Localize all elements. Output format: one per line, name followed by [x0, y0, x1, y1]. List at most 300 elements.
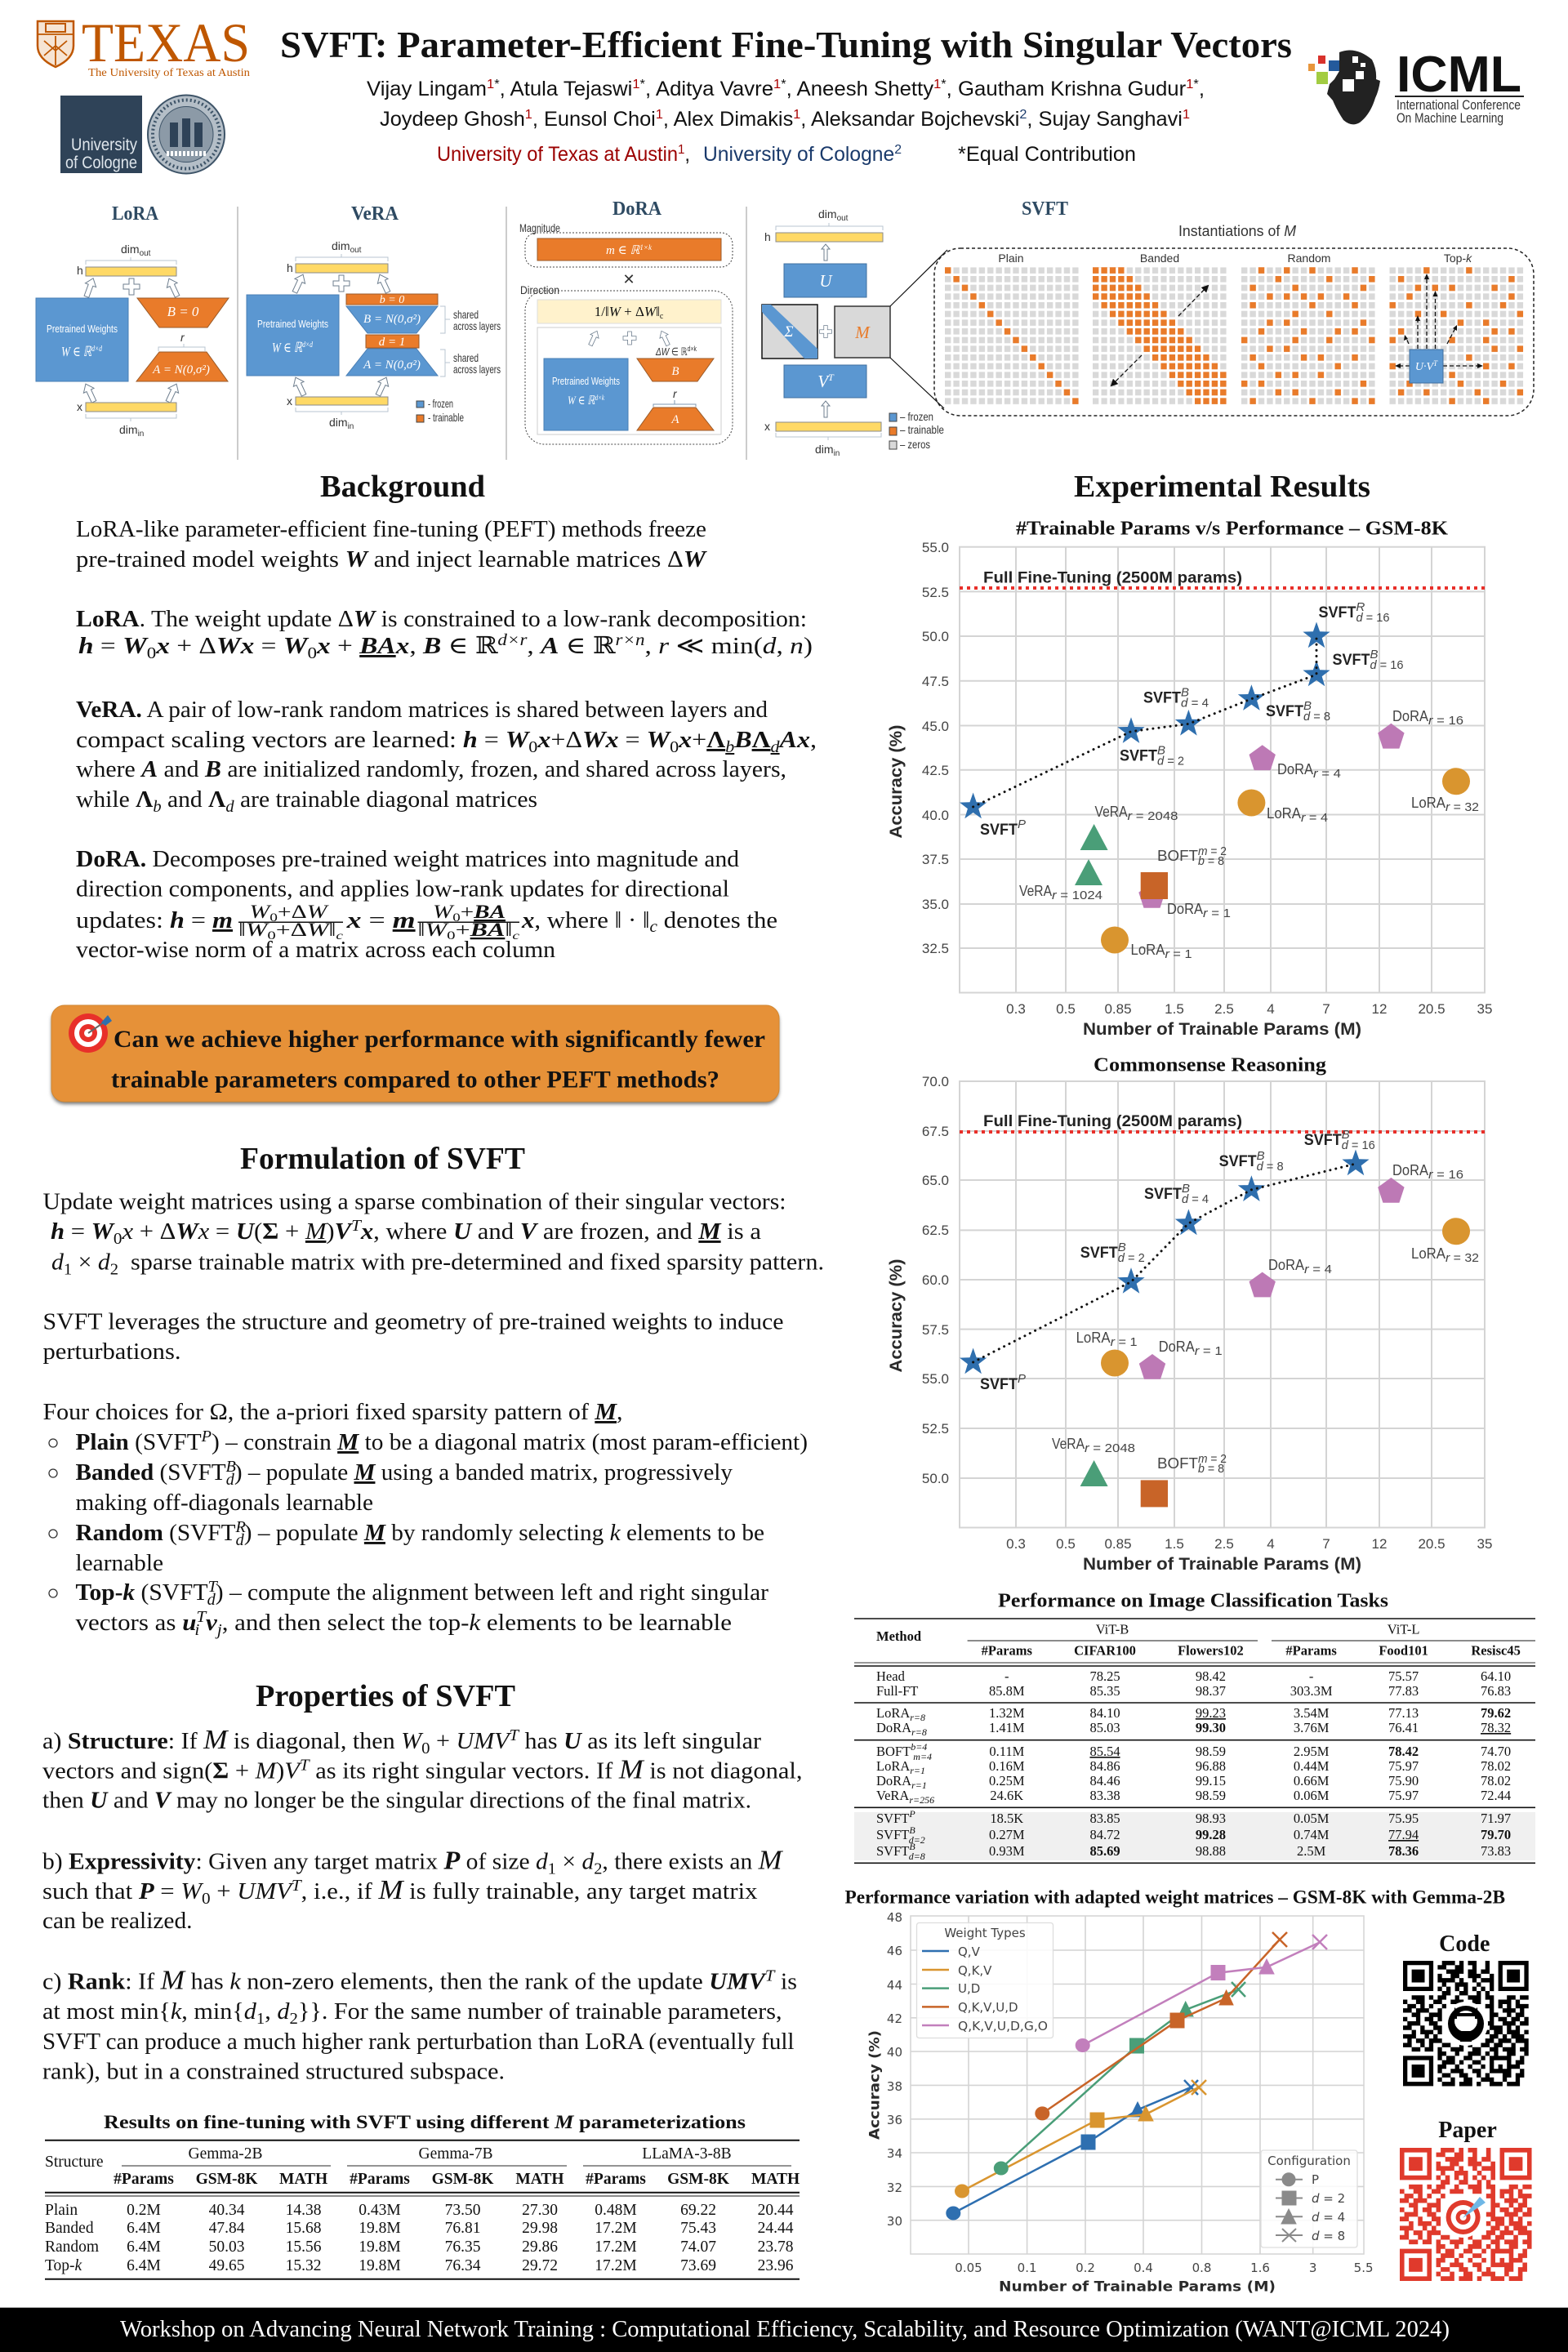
list: sparsity patterns: k elements to be learnable [469, 1610, 715, 1636]
point labels: BOFT [1157, 847, 1198, 864]
diagram: DoRA: W ∈ ℝ [568, 394, 603, 408]
point labels: r = 16 [1428, 714, 1463, 728]
diagram: SVFT: in [834, 449, 840, 458]
panel: background: A ∈ ℝ [541, 633, 608, 659]
point labels: d = 2 [1157, 755, 1184, 768]
panel: properties of SVFT: 0 [421, 1740, 430, 1757]
table: results on fine-tuning with M parameterizations: Banded [45, 2220, 94, 2237]
table: performance on image classification tasks: LoRA [876, 1758, 910, 1774]
table: results on fine-tuning with M parameterizations: 49.65 [209, 2257, 244, 2274]
table: performance on image classification tasks: 71.97 [1481, 1811, 1511, 1826]
panel: properties of SVFT: , [265, 1998, 277, 2025]
table: performance on image classification tasks: 74.70 [1481, 1744, 1511, 1759]
table: performance on image classification tasks: 75.97 [1388, 1788, 1419, 1803]
point labels: DoRA [1392, 707, 1429, 724]
icon: target with dart [69, 1013, 112, 1053]
panel: properties of SVFT: as its right singular vectors. If [310, 1757, 619, 1784]
list: sparsity patterns: Plain (SVFT [75, 1429, 201, 1455]
chart: trainable params vs performance on GSM-8K: 4 [1267, 1001, 1275, 1017]
table: performance on image classification tasks: 1.41M [989, 1720, 1025, 1735]
authors: Joydeep Ghosh [380, 108, 523, 131]
table: results on fine-tuning with M parameterizations: 29.86 [522, 2238, 558, 2256]
logo: University of Texas: TEXAS [82, 11, 250, 74]
diagram: SVFT: Instantiations of M [1178, 223, 1296, 239]
table: results on fine-tuning with M parameterizations: 76.34 [445, 2257, 481, 2274]
chart: commonsense reasoning: 55.0 [922, 1371, 949, 1387]
point labels: B [1181, 686, 1189, 699]
table: performance on image classification tasks: 78.42 [1388, 1744, 1419, 1759]
list: sparsity patterns: d [236, 1531, 245, 1549]
point labels: SVFT [1080, 1245, 1118, 1262]
panel: background: are trainable diagonal matrices [234, 786, 537, 813]
panel: background: LoRA. The weight update ΔW is constrained to a low-rank decomposition: [76, 606, 807, 632]
list: sparsity patterns: d [207, 1591, 216, 1609]
diagram: SVFT: dim [818, 207, 837, 220]
chart: performance variation with adapted weight matrices [844, 1886, 1505, 2295]
logo: ICML: International Conference [1396, 97, 1521, 113]
table: performance on image classification tasks: 2.95M [1294, 1744, 1330, 1759]
chart: commonsense reasoning: 57.5 [922, 1322, 949, 1338]
point labels: B [1182, 1182, 1190, 1196]
diagram: VeRA: b = 0 [380, 294, 404, 306]
panel: background: r ≪ min( d, n) [658, 633, 812, 659]
markers [960, 622, 1470, 954]
grid: top-k [1390, 267, 1526, 407]
table: results on fine-tuning with M parameterizations: #Params [586, 2171, 646, 2188]
table: performance on image classification tasks: 77.94 [1388, 1827, 1419, 1842]
table: results on fine-tuning with M parameterizations: #Params [350, 2171, 410, 2188]
chart: trainable params vs performance on GSM-8K: #Trainable Params v/s Performance – GSM-8K [1016, 518, 1448, 539]
table: performance on image classification tasks: ViT-B [1096, 1622, 1129, 1637]
panel: background: while Λ [76, 786, 153, 813]
panel: background: vector-wise norm of a matrix across each column [76, 937, 556, 963]
point labels [980, 1128, 1479, 1476]
panel: properties of SVFT: at most min{k, min{d [42, 1998, 256, 2025]
point labels: LoRA [1076, 1329, 1111, 1346]
panel: formulation of SVFT: Update weight matrices using a sparse combination of their singular vectors: [42, 1189, 786, 1215]
table: performance on image classification tasks: 3.76M [1294, 1720, 1330, 1735]
table: performance on image classification tasks: 0.11M [989, 1744, 1025, 1759]
table: results on fine-tuning with M parameterizations: 19.8M [359, 2220, 401, 2237]
chart: commonsense reasoning: 62.5 [922, 1223, 949, 1238]
list: sparsity patterns [49, 1428, 808, 1639]
table: performance on image classification tasks: 0.66M [1294, 1773, 1330, 1788]
diagram: DoRA: m ∈ ℝ [606, 244, 639, 257]
point labels: SVFT [1333, 652, 1370, 669]
list: sparsity patterns: ) – constrain [212, 1429, 337, 1455]
chart: trainable params vs performance on GSM-8K: 42.5 [922, 763, 949, 778]
chart: trainable params vs performance on GSM-8K: 37.5 [922, 852, 949, 867]
table: results on fine-tuning with M parameterizations: GSM-8K [196, 2171, 258, 2188]
table: performance on image classification tasks: 98.59 [1196, 1788, 1226, 1803]
authors: Vijay Lingam [367, 78, 483, 100]
formula: DoRA update: x = m [345, 907, 416, 933]
table: results on fine-tuning with M parameterizations: Random [45, 2238, 99, 2256]
panel: background: + BAx, B ∈ ℝ [336, 633, 490, 659]
affiliations: 1 [678, 143, 685, 157]
table: performance on image classification tasks: 73.83 [1481, 1843, 1511, 1859]
table: performance on image classification tasks: 78.32 [1481, 1720, 1511, 1735]
table: performance on image classification tasks: 98.88 [1196, 1843, 1226, 1859]
logo: University of Texas [38, 11, 250, 79]
formula: DoRA update: W [433, 902, 455, 922]
table: performance on image classification tasks: - [1309, 1668, 1313, 1684]
point labels: P [1018, 1372, 1026, 1386]
diagram: SVFT: U [819, 271, 833, 291]
table: results on fine-tuning with M parameterizations: 15.68 [286, 2220, 322, 2237]
table: performance on image classification tasks: m=4 [913, 1751, 932, 1762]
table: performance on image classification tasks: Head [876, 1668, 906, 1684]
diagram: SVFT: – frozen [900, 410, 933, 423]
diagram: DoRA: Direction [520, 283, 559, 296]
panel: properties of SVFT: 1 [548, 1860, 556, 1878]
authors: , Sujay Sanghavi [1027, 108, 1183, 131]
panel: properties of SVFT: M [758, 1846, 783, 1875]
panel: background: , [810, 727, 816, 753]
chart: performance variation with adapted weight matrices: 1.6 [1250, 2261, 1270, 2275]
table: results on fine-tuning with M parameterizations: 15.56 [286, 2238, 322, 2256]
table: performance on image classification tasks: d=8 [909, 1851, 925, 1862]
point labels: r = 2048 [1127, 809, 1178, 823]
panel: properties of SVFT: T [292, 1877, 303, 1895]
panel: formulation of SVFT: × [72, 1250, 98, 1276]
panel: properties of SVFT: 2 [594, 1860, 602, 1878]
table: performance on image classification tasks: r=8 [911, 1726, 927, 1738]
table: performance on image classification tasks: 99.28 [1196, 1827, 1226, 1842]
callout: research question: trainable parameters compared to other PEFT methods? [111, 1067, 719, 1093]
legend: configuration [1261, 2150, 1357, 2247]
panel: properties of SVFT: has [519, 1728, 564, 1754]
chart: performance variation with adapted weight matrices: Accuracy (%) [867, 2030, 884, 2140]
diagram: DoRA: 1×k [639, 243, 653, 252]
table: performance on image classification tasks: 72.44 [1481, 1788, 1511, 1803]
table: performance on image classification tasks: 0.06M [1294, 1788, 1330, 1803]
panel: properties of SVFT: such that P = W [42, 1878, 201, 1904]
table: performance on image classification tasks: d=2 [909, 1834, 925, 1846]
top-k alignment box and arrows: T [1433, 359, 1438, 368]
panel: formulation of SVFT: + ΔWx = U(Σ + M)V [139, 1218, 350, 1245]
panel: properties of SVFT: can be realized. [42, 1908, 193, 1934]
chart: performance variation with adapted weight matrices: 0.1 [1018, 2261, 1037, 2275]
formula: DoRA update: 0 [452, 911, 461, 924]
chart: trainable params vs performance on GSM-8K: 47.5 [922, 674, 949, 689]
diagram: SVFT: – trainable [900, 423, 944, 436]
point labels: r = 32 [1446, 800, 1479, 814]
chart: performance variation with adapted weight matrices: 48 [887, 1910, 902, 1925]
point labels: d = 16 [1342, 1138, 1375, 1152]
diagram: VeRA: W ∈ ℝ [272, 340, 312, 355]
table: performance on image classification tasks: Full-FT [876, 1683, 918, 1699]
formula: DoRA update: W ‖ [307, 920, 334, 940]
table: results on fine-tuning with M parameterizations: 24.44 [758, 2220, 794, 2237]
point labels: P [1018, 817, 1026, 831]
table: performance on image classification tasks: P [908, 1808, 915, 1820]
logo: University of Cologne: of Cologne [65, 154, 137, 172]
table: performance on image classification tasks: 85.03 [1089, 1720, 1120, 1735]
diagram: VeRA: across layers [453, 319, 501, 332]
point labels: SVFT [1143, 689, 1181, 707]
panel: background: 0 [147, 644, 156, 662]
list: sparsity patterns: T [196, 1608, 207, 1626]
table: performance on image classification tasks: DoRA [876, 1720, 911, 1735]
authors: 1 [632, 78, 640, 91]
point labels: d = 8 [1303, 710, 1330, 724]
point labels: R [1356, 600, 1365, 614]
point labels: B [1342, 1128, 1350, 1142]
panel: formulation of SVFT: 2 [110, 1261, 118, 1279]
diagram: LoRA: h [77, 264, 83, 277]
table: results on fine-tuning with M parameterizations: 6.4M [127, 2220, 161, 2237]
chart: trainable params vs performance on GSM-8K: Accuracy (%) [887, 725, 906, 838]
table: performance on image classification tasks: 98.59 [1196, 1744, 1226, 1759]
formula: DoRA update: 0 [267, 929, 276, 942]
table: results on fine-tuning with M parameterizations: Gemma-7B [419, 2145, 492, 2163]
table: performance on image classification tasks: VeRA [876, 1788, 909, 1803]
point labels: d = 16 [1356, 611, 1390, 625]
table: performance on image classification tasks: 85.35 [1089, 1683, 1120, 1699]
table: performance on image classification tasks: 78.02 [1481, 1773, 1511, 1788]
panel: properties of SVFT: T [510, 1726, 520, 1744]
diagram: DoRA: ΔW ∈ ℝ [656, 345, 693, 358]
chart: commonsense reasoning: 0.3 [1006, 1536, 1026, 1552]
heading: Experimental Results: Experimental Results [1074, 470, 1370, 504]
markers [960, 1150, 1470, 1507]
diagram: DoRA: DoRA [612, 198, 662, 220]
icon: QR code with GitHub logo [1403, 1961, 1529, 2086]
table: results on fine-tuning with M parameterizations: 0.43M [359, 2202, 401, 2219]
panel: properties of SVFT [42, 1679, 802, 2084]
panel: properties of SVFT: c) Rank: If M has k non-zero elements, then the rank of the update UMV [42, 1965, 763, 1996]
authors: , Atula Tejaswi [500, 78, 632, 100]
panel: properties of SVFT: b) Expressivity: Given any target matrix P of size d [42, 1846, 548, 1875]
table: performance on image classification tasks: 2.5M [1297, 1843, 1326, 1859]
table: results on fine-tuning with M parameterizations: 76.81 [445, 2220, 480, 2237]
table: results on fine-tuning with M parameterizations: GSM-8K [432, 2171, 494, 2188]
formula: DoRA update: c [650, 918, 657, 936]
diagram: SVFT: SVFT [1022, 198, 1068, 220]
diagram: SVFT: Plain [998, 252, 1024, 265]
list: sparsity patterns: Banded (SVFT [75, 1459, 225, 1486]
list: sparsity patterns: , and then select the top- [222, 1610, 469, 1636]
chart: trainable params vs performance on GSM-8K: 12 [1372, 1001, 1387, 1017]
list: sparsity patterns: P [201, 1428, 212, 1446]
chart: performance variation with adapted weight matrices: 30 [887, 2214, 902, 2229]
list: sparsity patterns: making off-diagonals learnable [75, 1490, 373, 1516]
table: results on fine-tuning with M parameterizations: 23.96 [758, 2257, 794, 2274]
series: Q,K,V,U,D,G,O [1076, 1935, 1327, 2051]
chart: trainable params vs performance on GSM-8K: 45.0 [922, 719, 949, 734]
diagram: SVFT: T [828, 372, 835, 383]
panel: background: 0 [670, 738, 679, 756]
table: performance on image classification tasks: 0.27M [989, 1827, 1025, 1842]
diagram: LoRA: LoRA [112, 203, 159, 225]
chart: trainable params vs performance on GSM-8K: 40.0 [922, 808, 949, 823]
diagram: LoRA [36, 203, 229, 439]
callout: research question: Can we achieve higher performance with significantly fewer [114, 1026, 765, 1053]
panel: properties of SVFT: + [430, 1728, 456, 1754]
chart: trainable params vs performance on GSM-8K: 7 [1322, 1001, 1330, 1017]
diagram: LoRA: x [77, 400, 82, 413]
chart: performance variation with adapted weight matrices: 0.8 [1192, 2261, 1211, 2275]
table: results on fine-tuning with M parameterizations: #Params [114, 2171, 174, 2188]
panel: background: B [733, 727, 752, 753]
logo: University of Cologne: University [71, 136, 137, 154]
table: results on fine-tuning with M parameterizations: 27.30 [522, 2202, 558, 2219]
diagram: LoRA: Pretrained Weights [47, 323, 118, 335]
top-k alignment box and arrows [1395, 274, 1483, 383]
table: performance on image classification tasks: ViT-L [1388, 1622, 1419, 1637]
table: results on fine-tuning with M parameterizations: 17.2M [595, 2220, 637, 2237]
chart: commonsense reasoning: 67.5 [922, 1124, 949, 1139]
table: results on fine-tuning with M parameterizations: 74.07 [680, 2238, 716, 2256]
table: results on fine-tuning with M parameterizations: 29.98 [522, 2220, 558, 2237]
table: performance on image classification tasks: r=1 [911, 1780, 927, 1791]
table: performance on image classification tasks: 79.62 [1481, 1705, 1511, 1721]
table: performance on image classification tasks: 1.32M [989, 1705, 1025, 1721]
table: performance on image classification tasks: B [909, 1841, 915, 1852]
table: performance on image classification tasks: 79.70 [1481, 1827, 1511, 1842]
chart: commonsense reasoning: Accuracy (%) [887, 1259, 906, 1372]
formula: DoRA update: c [512, 930, 520, 942]
logo: ICML: On Machine Learning [1396, 110, 1503, 126]
table: performance on image classification tasks: 78.02 [1481, 1758, 1511, 1774]
panel: properties of SVFT: , there exists an [602, 1849, 759, 1875]
chart: trainable params vs performance on GSM-8K: 32.5 [922, 941, 949, 956]
formula: DoRA update: 0 [270, 911, 278, 924]
table: results on fine-tuning with M parameterizations: 69.22 [680, 2202, 716, 2219]
panel: properties of SVFT: d [277, 1998, 290, 2025]
panel: properties of SVFT: T [300, 1756, 311, 1774]
arrows: banded growth [1111, 286, 1208, 385]
panel: background: b [725, 738, 734, 756]
chart: performance variation with adapted weight matrices: 0.2 [1076, 2261, 1095, 2275]
diagram: VeRA: - frozen [428, 397, 453, 410]
chart: commonsense reasoning: Commonsense Reasoning [1094, 1055, 1326, 1076]
legend: configuration: P [1312, 2172, 1319, 2187]
logo: ICML [1308, 47, 1524, 126]
table: performance on image classification tasks: SVFT [876, 1811, 909, 1826]
chart: trainable params vs performance on GSM-8K: 1.5 [1165, 1001, 1184, 1017]
table: performance on image classification tasks: - [1004, 1668, 1009, 1684]
chart: trainable params vs performance on GSM-8K: 50.0 [922, 629, 949, 644]
table: performance on image classification tasks: 83.38 [1089, 1788, 1120, 1803]
chart: trainable params vs performance on GSM-8K: 35.0 [922, 897, 949, 912]
panel: properties of SVFT: T [765, 1967, 776, 1984]
diagram: SVFT: dim [815, 443, 834, 456]
table: performance on image classification tasks: b=4 [911, 1741, 927, 1753]
table: results on fine-tuning with M parameterizations: 75.43 [680, 2220, 716, 2237]
authors: , Aleksandar Bojchevski [800, 108, 1019, 131]
table: performance on image classification tasks: BOFT [876, 1744, 911, 1759]
panel: properties of SVFT: U as its left singular [564, 1728, 755, 1754]
diagram: VeRA: in [348, 422, 354, 431]
table: performance on image classification tasks: 0.16M [989, 1758, 1025, 1774]
table: performance on image classification tasks: 78.36 [1388, 1843, 1419, 1859]
formula: DoRA update: c [336, 930, 344, 942]
diagram: DoRA: Pretrained Weights [552, 375, 620, 387]
table: results on fine-tuning with M parameterizations: 0.2M [127, 2202, 161, 2219]
panel: background: x [678, 727, 692, 753]
list: sparsity patterns: d [226, 1471, 235, 1489]
formula: DoRA update: BA ‖ [470, 920, 510, 940]
panel: properties of SVFT: then U and V may no longer be the singular directions of the final matrix. [42, 1787, 751, 1813]
point labels: r = 1 [1165, 947, 1192, 961]
panel: paper QR [1400, 2118, 1532, 2281]
table: results on fine-tuning with M parameterizations: 73.50 [445, 2202, 480, 2219]
chart: commonsense reasoning: 70.0 [922, 1074, 949, 1089]
formula: DoRA update: + [456, 920, 470, 940]
list: sparsity patterns: Random (SVFT [75, 1520, 235, 1546]
panel: background: r×n [615, 631, 644, 649]
point labels: B [1118, 1241, 1126, 1254]
table: performance on image classification tasks: 0.25M [989, 1773, 1025, 1788]
point labels: d = 8 [1257, 1160, 1284, 1174]
table: results on fine-tuning with M parameterizations: Structure [45, 2154, 103, 2171]
authors: 1 [1183, 108, 1190, 122]
heading: Properties of SVFT: Properties of SVFT [256, 1679, 515, 1713]
chart: commonsense reasoning: 65.0 [922, 1173, 949, 1188]
chart: performance variation with adapted weight matrices: 0.4 [1134, 2261, 1153, 2275]
legend: weight types [916, 1922, 1054, 2038]
table: results on fine-tuning with M parameterizations: 15.32 [286, 2257, 322, 2274]
point labels: DoRA [1392, 1161, 1429, 1178]
chart: commonsense reasoning: 2.5 [1214, 1536, 1234, 1552]
chart: performance variation with adapted weight matrices: 32 [887, 2180, 902, 2195]
point labels: DoRA [1277, 760, 1314, 777]
chart: trainable params vs performance on GSM-8K: 52.5 [922, 585, 949, 600]
diagram: DoRA: 1/‖W + ΔW‖ [595, 304, 660, 319]
table: performance on image classification tasks: Flowers102 [1178, 1643, 1244, 1658]
diagram: LoRA: out [140, 249, 151, 258]
authors: * [494, 78, 500, 91]
panel: properties of SVFT: + [211, 1878, 237, 1904]
authors: 1 [487, 78, 494, 91]
table: performance on image classification tasks: 84.86 [1089, 1758, 1120, 1774]
chart: commonsense reasoning: 0.5 [1056, 1536, 1076, 1552]
chart: commonsense reasoning: 52.5 [922, 1421, 949, 1437]
point labels: r = 4 [1304, 1263, 1332, 1276]
panel: properties of SVFT: × [556, 1849, 581, 1875]
diagram: DoRA [519, 198, 733, 444]
panel: background [76, 470, 817, 963]
table: results on fine-tuning with M parameterizations: Top-k [45, 2257, 82, 2274]
table: results on fine-tuning with M parameterizations: MATH [515, 2171, 564, 2188]
point labels: DoRA [1159, 1338, 1195, 1355]
diagram: SVFT: Banded [1140, 252, 1179, 265]
panel: properties of SVFT: is [774, 1968, 797, 1994]
list: sparsity patterns: i [194, 1621, 199, 1639]
panel: properties of SVFT: M is not diagonal, [619, 1754, 795, 1785]
authors: * [781, 78, 786, 91]
series: U,D [994, 1982, 1245, 2175]
table: performance on image classification tasks: 75.95 [1388, 1811, 1419, 1826]
table: results on fine-tuning with M parameterizations: 23.78 [758, 2238, 794, 2256]
diagram: VeRA: A = N(0,σ²) [363, 359, 421, 372]
diagram: LoRA: W ∈ ℝ [61, 344, 101, 359]
chart: commonsense reasoning: 50.0 [922, 1471, 949, 1486]
diagram: VeRA: h [287, 261, 293, 274]
authors: 1 [793, 108, 800, 122]
diagram: DoRA: r [673, 387, 678, 400]
legend: configuration: d = 2 [1312, 2191, 1345, 2206]
table: performance on image classification tasks: #Params [982, 1643, 1033, 1658]
table: performance on image classification tasks: 84.10 [1089, 1705, 1120, 1721]
diagram: LoRA: in [138, 430, 144, 439]
authors: , Alex Dimakis [663, 108, 793, 131]
table: performance on image classification tasks [854, 1591, 1535, 1863]
list: sparsity patterns: ) – compute the alignment between left and right singular [216, 1579, 768, 1606]
logo: University of Cologne [60, 95, 225, 173]
